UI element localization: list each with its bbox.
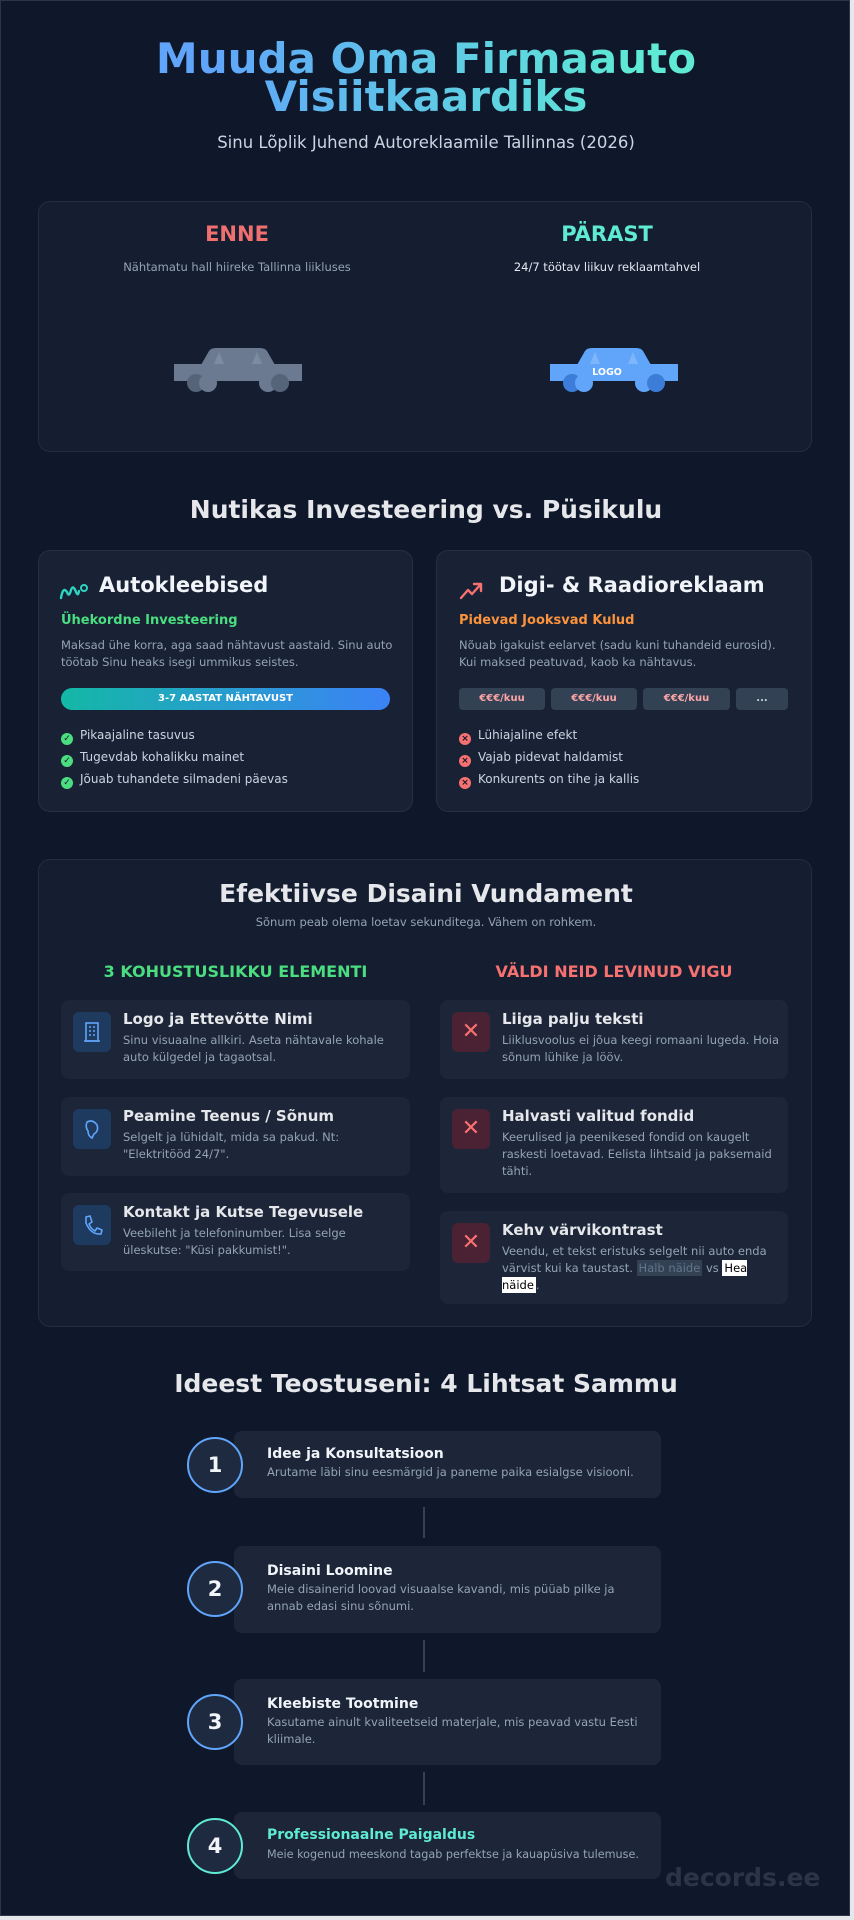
heading: steps: Ideest Teostuseni: 4 Lihtsat Sammu	[174, 1369, 678, 1398]
item: logo: Sinu visuaalne allkiri. Aseta nähtavale kohale auto külgedel ja tagaotsal.	[123, 1033, 384, 1064]
description: Kui maksed peatuvad, kaob ka nähtavus.	[459, 655, 696, 669]
icon: trend arrow	[460, 582, 482, 600]
list: benefits: ✓	[63, 756, 71, 766]
list: benefits: Jõuab tuhandete silmadeni päevas	[80, 772, 288, 786]
list: benefits: ✓	[63, 734, 71, 744]
icon: gray car	[174, 348, 302, 392]
item: too much text: Liiga palju teksti	[502, 1010, 644, 1028]
list: drawbacks: Lühiajaline efekt	[478, 728, 577, 742]
step 4: Professionaalne Paigaldus	[267, 1827, 475, 1843]
title: Muuda Oma Firmaauto	[156, 34, 696, 83]
step 3: Kleebiste Tootmine	[267, 1696, 418, 1712]
step 4: 4	[208, 1834, 222, 1858]
list: benefits	[61, 728, 288, 789]
step 2: 2	[208, 1577, 222, 1601]
heading: investment: Nutikas Investeering vs. Püsikulu	[190, 495, 662, 524]
title: Visiitkaardiks	[265, 72, 587, 121]
before text: Nähtamatu hall hiireke Tallinna liikluses	[123, 260, 351, 274]
item: logo: Logo ja Ettevõtte Nimi	[123, 1010, 313, 1028]
step 1: Arutame läbi sinu eesmärgid ja paneme paika esialgse visiooni.	[267, 1465, 634, 1479]
subheading: Pidevad Jooksvad Kulud	[459, 613, 634, 628]
after text: 24/7 töötav liikuv reklaamtahvel	[514, 260, 700, 274]
step 3: 3	[208, 1710, 222, 1734]
item: main service: Peamine Teenus / Sõnum	[123, 1107, 334, 1125]
cost pills: €€€/kuu	[571, 693, 617, 704]
list: drawbacks: Vajab pidevat haldamist	[478, 750, 623, 764]
list: benefits: ✓	[63, 778, 71, 788]
connector lines	[423, 1507, 425, 1538]
item: main service: Selgelt ja lühidalt, mida sa pakud. Nt: "Elektritööd 24/7".	[123, 1130, 339, 1161]
step 2: Meie disainerid loovad visuaalse kavandi, mis püüab pilke ja annab edasi sinu sõnumi.	[267, 1582, 615, 1613]
icon: phone	[73, 1205, 111, 1245]
subheading: Ühekordne Investeering	[61, 613, 238, 628]
list: drawbacks: ×	[461, 778, 469, 788]
panel: before/after	[38, 201, 812, 452]
step 3: Kasutame ainult kvaliteetseid materjale, mis peavad vastu Eesti kliimale.	[267, 1715, 638, 1746]
list: drawbacks: Konkurents on tihe ja kallis	[478, 772, 639, 786]
step 2	[187, 1546, 661, 1633]
icon: x: ✕	[462, 1019, 480, 1044]
cost pills: €€€/kuu	[664, 693, 709, 704]
item: main service	[61, 1097, 410, 1176]
column heading: mistakes: VÄLDI NEID LEVINUD VIGU	[496, 962, 732, 981]
item: contact: Kontakt ja Kutse Tegevusele	[123, 1203, 363, 1221]
step 4	[187, 1812, 661, 1879]
icon: x: ✕	[462, 1116, 480, 1141]
subtitle: Sinu Lõplik Juhend Autoreklaamile Tallinnas (2026)	[217, 133, 635, 152]
step 2: Disaini Loomine	[267, 1563, 393, 1579]
icon: x	[452, 1012, 490, 1052]
icon: message	[73, 1109, 111, 1149]
step 1: Idee ja Konsultatsioon	[267, 1446, 444, 1462]
item: contact	[61, 1193, 410, 1271]
icon: branded blue car: LOGO	[592, 367, 622, 378]
icon: x: ✕	[462, 1230, 480, 1255]
column heading: must-have: 3 KOHUSTUSLIKKU ELEMENTI	[104, 962, 367, 981]
list: benefits: Tugevdab kohalikku mainet	[80, 750, 244, 764]
list: drawbacks: ×	[461, 734, 469, 744]
card title: Autokleebised	[99, 573, 268, 597]
icon: building	[73, 1012, 111, 1052]
item: contact: Veebileht ja telefoninumber. Lisa selge üleskutse: "Küsi pakkumist!".	[123, 1226, 346, 1257]
icon: x	[452, 1223, 490, 1263]
item: bad fonts	[440, 1097, 788, 1193]
bar: 3-7 years: 3-7 AASTAT NÄHTAVUST	[158, 693, 293, 704]
icon: teal wave	[60, 584, 88, 600]
section title: Efektiivse Disaini Vundament	[219, 879, 633, 908]
step 1	[187, 1431, 661, 1498]
section subtitle: Sõnum peab olema loetav sekunditega. Vähem on rohkem.	[256, 915, 596, 929]
step 1: 1	[208, 1453, 222, 1477]
panel: digital & radio	[436, 550, 812, 812]
item: logo	[61, 1000, 410, 1079]
item: too much text: Liiklusvoolus ei jõua keegi romaani lugeda. Hoia sõnum lühike ja lööv.	[502, 1033, 779, 1064]
item: contrast: Veendu, et tekst eristuks selgelt nii auto enda värvist kui ka taustast. Halb näide vs Hea näide.	[502, 1244, 767, 1292]
cost pills: ...	[756, 693, 768, 704]
item: bad fonts: Keerulised ja peenikesed fondid on kaugelt raskesti loetavad. Eelista lihtsaid ja paksemaid tähti.	[502, 1130, 772, 1178]
card title: Digi- & Raadioreklaam	[499, 573, 765, 597]
title	[1, 40, 851, 116]
icon: x	[452, 1109, 490, 1149]
after heading: PÄRAST	[561, 222, 653, 246]
step 3	[187, 1679, 661, 1765]
description: Maksad ühe korra, aga saad nähtavust aastaid. Sinu auto töötab Sinu heaks isegi ummikus seistes.	[61, 638, 392, 669]
item: contrast: Kehv värvikontrast	[502, 1221, 663, 1239]
description	[459, 638, 776, 669]
cost pills: €€€/kuu	[479, 693, 525, 704]
list: drawbacks: ×	[461, 756, 469, 766]
description: Nõuab igakuist eelarvet (sadu kuni tuhandeid eurosid).	[459, 638, 776, 652]
item: too much text	[440, 1000, 788, 1079]
item: contrast	[440, 1211, 788, 1304]
before heading: ENNE	[205, 222, 269, 246]
panel: car stickers	[38, 550, 413, 812]
bar: 3-7 years	[61, 688, 390, 710]
watermark: decords.ee	[665, 1863, 820, 1892]
item: bad fonts: Halvasti valitud fondid	[502, 1107, 694, 1125]
step 4: Meie kogenud meeskond tagab perfektse ja kauapüsiva tulemuse.	[267, 1848, 639, 1861]
list: drawbacks	[459, 728, 639, 789]
panel: design foundation	[38, 859, 812, 1327]
list: benefits: Pikaajaline tasuvus	[80, 728, 195, 742]
icon: branded blue car	[550, 348, 678, 392]
cost pills	[459, 688, 788, 710]
